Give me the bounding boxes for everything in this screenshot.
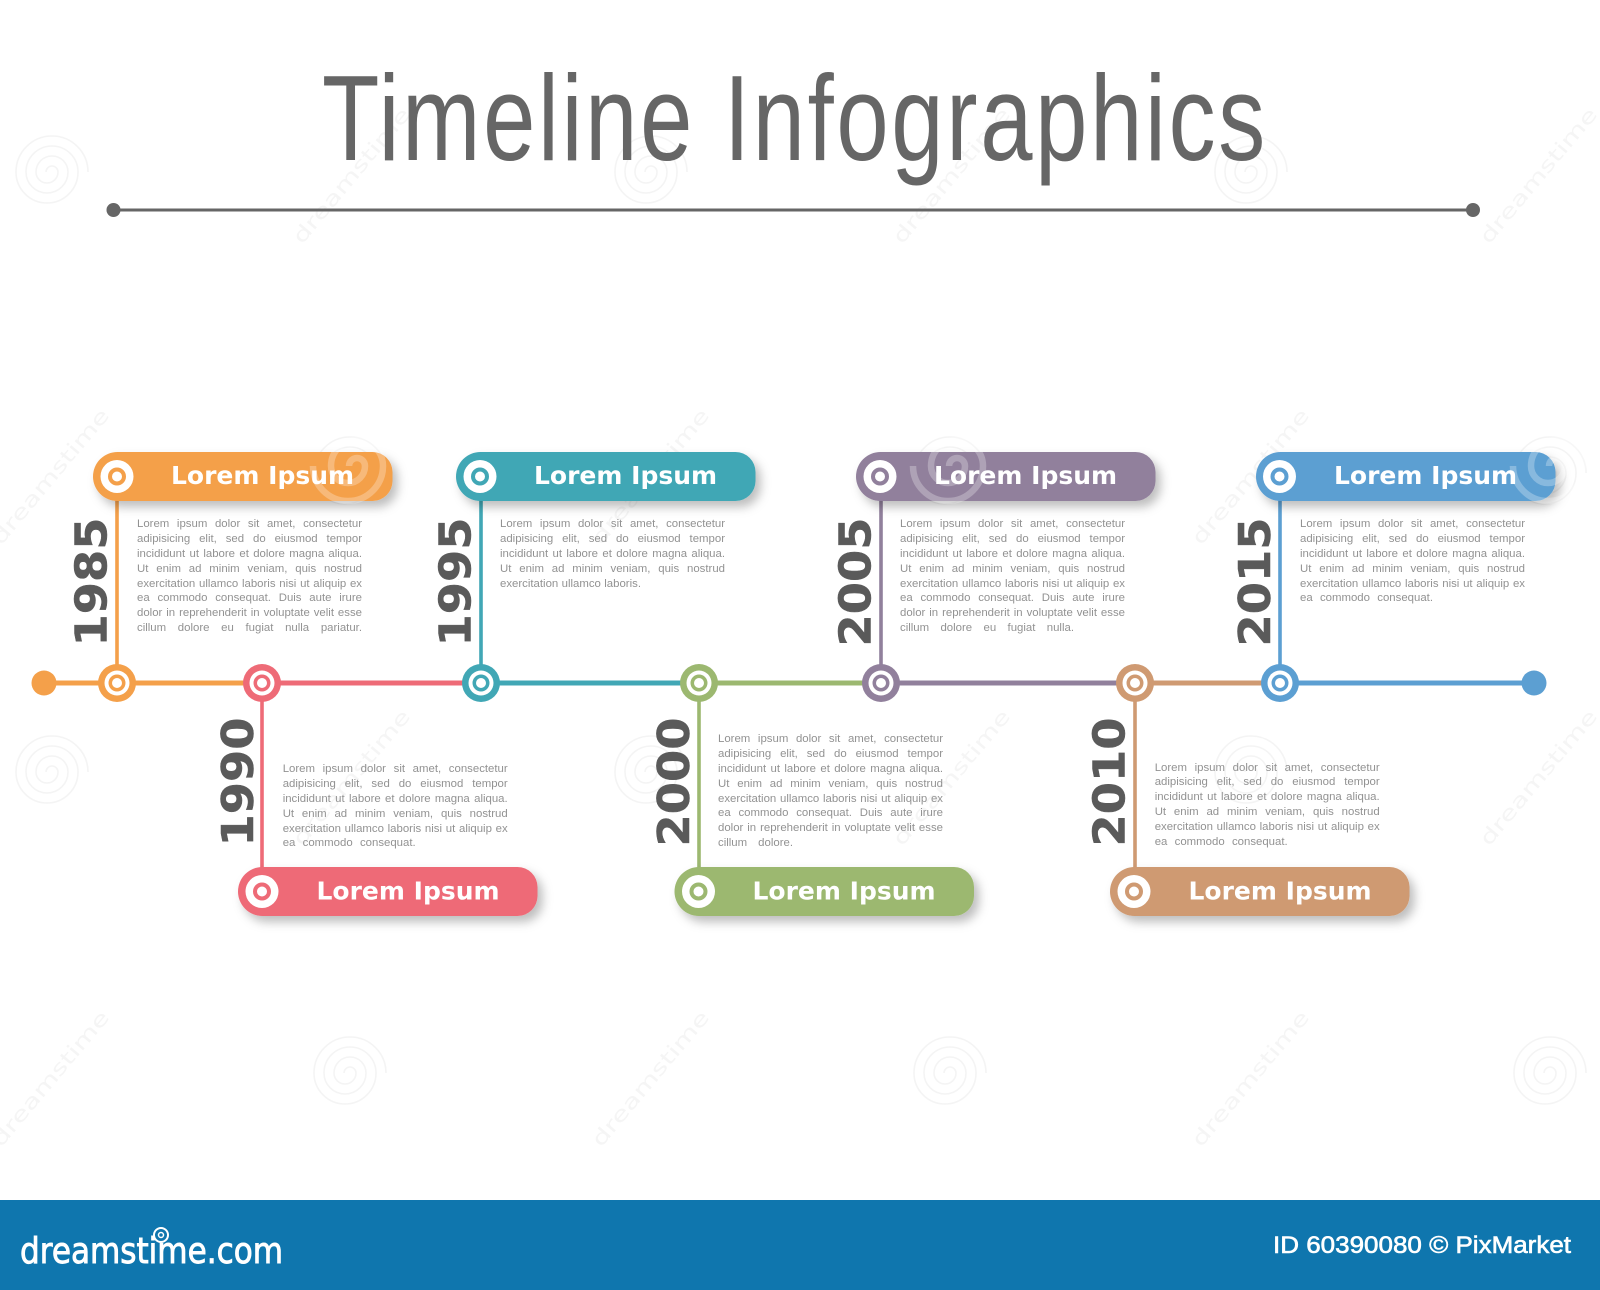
body text 1990: exercitation ullamco laboris nisi ut aliquip ex (283, 823, 508, 835)
year 2010: 2010 (1084, 718, 1136, 846)
body text 2000: exercitation ullamco laboris nisi ut aliquip ex (718, 793, 943, 805)
body text 1990: incididunt ut labore et dolore magna aliqua. (283, 793, 508, 805)
watermark text: dreamstime (887, 103, 1015, 248)
node 2000 (680, 664, 718, 702)
body text 2000 (718, 732, 948, 857)
watermark text: dreamstime (1474, 103, 1600, 248)
watermark text: dreamstime (287, 103, 415, 248)
panel: 2010 (1084, 664, 1410, 916)
body text 2015: adipisicing elit, sed do eiusmod tempor (1300, 533, 1525, 545)
year 2005: 2005 (830, 518, 882, 646)
year 1985: 1985 (66, 518, 118, 646)
watermark overlays on pills (313, 440, 1583, 501)
node 2015 (1261, 664, 1299, 702)
body text 1990 (283, 762, 513, 857)
watermark text: dreamstime (1186, 1006, 1314, 1151)
body text 2010: Ut enim ad minim veniam, quis nostrud (1155, 806, 1380, 818)
year 2015: 2015 (1230, 518, 1281, 646)
label pill 2000 (674, 867, 974, 916)
body text 2015 (1300, 517, 1530, 612)
footer bar (0, 1200, 1600, 1290)
body text 1985: Lorem ipsum dolor sit amet, consectetur (137, 518, 362, 530)
body text 1995: adipisicing elit, sed do eiusmod tempor (500, 533, 725, 545)
body text 2010: exercitation ullamco laboris nisi ut aliquip ex (1155, 821, 1380, 833)
body text 2005: dolor in reprehenderit in voluptate velit esse (900, 607, 1125, 619)
watermark text: dreamstime (1474, 705, 1600, 850)
label pill 1995: Lorem Ipsum (534, 461, 717, 490)
node 2010 (1116, 664, 1154, 702)
footer image id: ID 60390080 © PixMarket (1273, 1232, 1571, 1259)
body text 2000: Lorem ipsum dolor sit amet, consectetur (718, 733, 943, 745)
body text 2015: Lorem ipsum dolor sit amet, consectetur (1300, 518, 1525, 530)
year 1995: 1995 (430, 518, 482, 646)
panel: 2015 (1230, 452, 1556, 702)
body text 2000: cillum dolore. (718, 837, 793, 849)
body text 1995: Lorem ipsum dolor sit amet, consectetur (500, 518, 725, 530)
label pill 1990 (238, 867, 538, 916)
body text 2000: ea commodo consequat. Duis aute irure (718, 807, 943, 819)
body text 1995: incididunt ut labore et dolore magna aliqua. (500, 548, 725, 560)
body text 1995: Ut enim ad minim veniam, quis nostrud (500, 563, 725, 575)
body text 2015: ea commodo consequat. (1300, 592, 1433, 604)
body text 2005: ea commodo consequat. Duis aute irure (900, 592, 1125, 604)
panel: 2005 (830, 452, 1156, 702)
label pill 2005 (856, 452, 1156, 501)
body text 1985: adipisicing elit, sed do eiusmod tempor (137, 533, 362, 545)
body text 1985: incididunt ut labore et dolore magna aliqua. (137, 548, 362, 560)
label pill 2010 (1110, 867, 1410, 916)
body text 1990: Lorem ipsum dolor sit amet, consectetur (283, 763, 508, 775)
body text 1985: exercitation ullamco laboris nisi ut aliquip ex (137, 578, 362, 590)
label pill 1985: Lorem Ipsum (171, 461, 354, 490)
body text 2000: adipisicing elit, sed do eiusmod tempor (718, 748, 943, 760)
body text 2010 (1155, 760, 1385, 856)
watermark text: dreamstime (287, 705, 415, 850)
node 1985 (98, 664, 136, 702)
body text 2010: Lorem ipsum dolor sit amet, consectetur (1155, 762, 1380, 774)
label pill 1995 (456, 452, 756, 501)
body text 1985: cillum dolore eu fugiat nulla pariatur. (137, 622, 362, 634)
panel: 1990 (213, 664, 538, 916)
body text 2010: incididunt ut labore et dolore magna aliqua. (1155, 791, 1380, 803)
label pill 1985 (93, 452, 392, 501)
body text 2005: Ut enim ad minim veniam, quis nostrud (900, 563, 1125, 575)
year 2000: 2000 (649, 718, 700, 846)
body text 2005: incididunt ut labore et dolore magna aliqua. (900, 548, 1125, 560)
label pill 2000: Lorem Ipsum (752, 876, 936, 906)
body text 1985: Ut enim ad minim veniam, quis nostrud (137, 563, 362, 575)
body text 1995: exercitation ullamco laboris. (500, 578, 641, 590)
watermark spirals (16, 136, 1586, 1104)
watermark text: dreamstime (1186, 404, 1314, 549)
body text 2015: incididunt ut labore et dolore magna aliqua. (1300, 548, 1525, 560)
year 1990: 1990 (213, 718, 264, 846)
node 1995 (462, 664, 500, 702)
label pill 1990: Lorem Ipsum (316, 876, 500, 906)
body text 1995 (500, 517, 730, 597)
body text 1985 (137, 517, 367, 642)
body text 2005: Lorem ipsum dolor sit amet, consectetur (900, 518, 1125, 530)
footer logo: dreamstime.com (20, 1231, 283, 1272)
node 2005 (862, 664, 900, 702)
body text 2000: Ut enim ad minim veniam, quis nostrud (718, 778, 943, 790)
body text 2005: exercitation ullamco laboris nisi ut aliquip ex (900, 578, 1125, 590)
body text 2000: dolor in reprehenderit in voluptate velit esse (718, 822, 943, 834)
title: Timeline Infographics (322, 50, 1265, 187)
body text 1990: ea commodo consequat. (283, 837, 416, 849)
body text 2015: Ut enim ad minim veniam, quis nostrud (1300, 563, 1525, 575)
watermark text: dreamstime (586, 1006, 714, 1151)
body text 1985: ea commodo consequat. Duis aute irure (137, 592, 362, 604)
body text 1985: dolor in reprehenderit in voluptate velit esse (137, 607, 362, 619)
watermark text: dreamstime (586, 404, 714, 549)
timeline axis (32, 670, 1546, 696)
watermark text: dreamstime (887, 705, 1015, 850)
body text 2010: ea commodo consequat. (1155, 836, 1288, 848)
body text 1990: adipisicing elit, sed do eiusmod tempor (283, 778, 508, 790)
body text 2005: cillum dolore eu fugiat nulla. (900, 622, 1074, 634)
node 1990 (243, 664, 281, 702)
body text 1990: Ut enim ad minim veniam, quis nostrud (283, 808, 508, 820)
label pill 2015 (1256, 452, 1556, 501)
body text 2005: adipisicing elit, sed do eiusmod tempor (900, 533, 1125, 545)
body text 2015: exercitation ullamco laboris nisi ut aliquip ex (1300, 578, 1525, 590)
label pill 2015: Lorem Ipsum (1334, 461, 1517, 490)
panel: 1985 (66, 452, 392, 702)
panel: 1995 (430, 452, 756, 702)
label pill 2010: Lorem Ipsum (1188, 876, 1372, 906)
panel: 2000 (649, 664, 974, 916)
body text 2010: adipisicing elit, sed do eiusmod tempor (1155, 776, 1380, 788)
title rule (106, 203, 1480, 217)
body text 2000: incididunt ut labore et dolore magna aliqua. (718, 763, 943, 775)
label pill 2005: Lorem Ipsum (934, 461, 1117, 490)
body text 2005 (900, 517, 1130, 642)
